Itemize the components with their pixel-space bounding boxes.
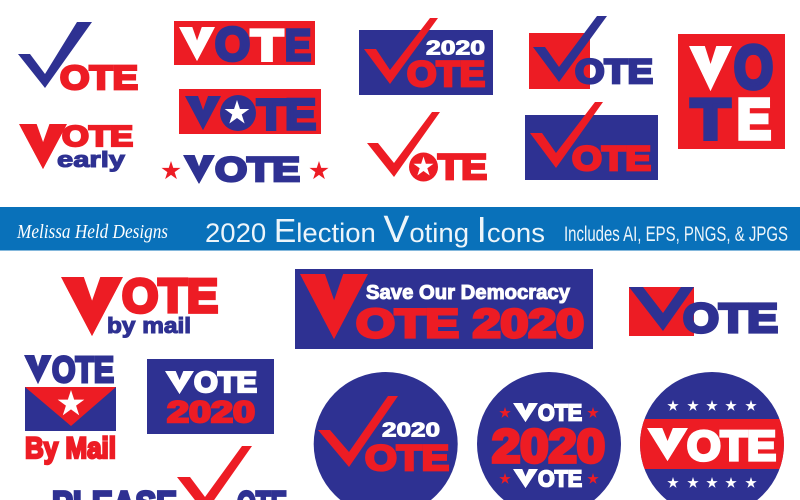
- icon: Save Our Democracy banner: [295, 269, 593, 349]
- icon: blue check with red OTE: OTE: [60, 59, 138, 96]
- icon: red box chevron VOTE: [629, 287, 778, 341]
- icon: red banner VOTE: [174, 21, 315, 65]
- banner title: 2020 Election Voting Icons: [205, 209, 545, 251]
- icon: red square stacked VOTE: V: [689, 32, 732, 105]
- icon: red square with blue check VOTE: [529, 16, 653, 91]
- icon: blue box VOTE 2020: OTE: [194, 367, 257, 399]
- icon: VOTE envelope By Mail: [24, 346, 116, 465]
- icon: red banner VOTE: E: [285, 21, 311, 70]
- icon: blue box with red check VOTE: OTE: [572, 140, 651, 178]
- icon: red square with blue check VOTE: OTE: [575, 53, 653, 91]
- badge: check 2020 VOTE circle: [314, 372, 458, 500]
- icon: PLEASE VOTE: [52, 446, 287, 500]
- title banner: [0, 207, 800, 251]
- icon: blue box with red check VOTE: [525, 102, 658, 180]
- designer credit: Melissa Held Designs: [16, 221, 168, 243]
- icon: VOTE early: OTE: [62, 121, 133, 153]
- icon: blue box VOTE 2020: [147, 359, 274, 434]
- icon: blue check with red OTE: [18, 22, 138, 96]
- icon: VOTE by mail: OTE: [122, 269, 218, 322]
- icon: red banner VOTE with star: TE: [257, 91, 316, 139]
- icon: VOTE envelope By Mail: V: [24, 346, 52, 393]
- icon: blue box VOTE 2020: V: [165, 364, 194, 401]
- icon: VOTE between stars: OTE: [215, 151, 300, 189]
- icon: blue box check 2020 VOTE: [359, 18, 493, 95]
- badge: VOTE 2020 VOTE circle: V: [513, 397, 538, 428]
- badge: VOTE 2020 VOTE circle: OTE: [538, 466, 582, 492]
- icon: blue box check 2020 VOTE: OTE: [407, 55, 485, 94]
- icon: Save Our Democracy banner: Save Our Democracy: [366, 282, 571, 304]
- icon: Save Our Democracy banner: OTE 2020: [356, 302, 584, 346]
- icon: red banner VOTE: O: [215, 18, 250, 70]
- badge: VOTE 2020 VOTE circle: [477, 372, 621, 500]
- icon: red check with star O: [367, 112, 487, 187]
- icon: VOTE envelope By Mail: By Mail: [25, 432, 116, 465]
- badge: VOTE 2020 VOTE circle: V: [513, 463, 538, 494]
- badge: stars and red band VOTE circle: V: [647, 419, 688, 472]
- badge: VOTE 2020 VOTE circle: 2020: [492, 420, 605, 472]
- icon: red banner VOTE: T: [251, 21, 283, 70]
- badge: stars and red band VOTE circle: OTE: [687, 422, 776, 469]
- icon: red square stacked VOTE: E: [737, 88, 771, 152]
- icon: VOTE by mail: V: [61, 260, 123, 355]
- icon: red square stacked VOTE: T: [691, 88, 730, 152]
- badge: stars and red band VOTE circle: [640, 372, 784, 500]
- icon: Save Our Democracy banner: V: [300, 254, 368, 359]
- badge: VOTE 2020 VOTE circle: OTE: [538, 400, 582, 426]
- icon: red banner VOTE: V: [179, 18, 215, 72]
- icon: red banner VOTE with star: V: [185, 88, 221, 141]
- icon: red square stacked VOTE: O: [734, 34, 773, 101]
- icon: red banner VOTE with star: [179, 89, 321, 134]
- icon: red check with star O: TE: [438, 148, 487, 187]
- badge: check 2020 VOTE circle: OTE: [365, 439, 449, 478]
- icon: VOTE between stars: [162, 155, 328, 184]
- icon: red square stacked VOTE: [678, 32, 785, 152]
- icon: blue box check 2020 VOTE: 2020: [426, 38, 485, 60]
- icon: red box chevron VOTE: OTE: [683, 295, 778, 341]
- icon: blue box VOTE 2020: 2020: [167, 396, 255, 429]
- icon: VOTE by mail: [61, 277, 218, 338]
- icon: VOTE by mail: by mail: [107, 313, 191, 338]
- icon: VOTE envelope By Mail: OTE: [52, 349, 114, 390]
- icon: VOTE early: [19, 124, 134, 172]
- icon: VOTE between stars: V: [183, 148, 215, 192]
- icon: VOTE early: early: [57, 147, 126, 172]
- icon: VOTE early: V: [19, 110, 67, 183]
- badge: check 2020 VOTE circle: 2020: [382, 420, 440, 442]
